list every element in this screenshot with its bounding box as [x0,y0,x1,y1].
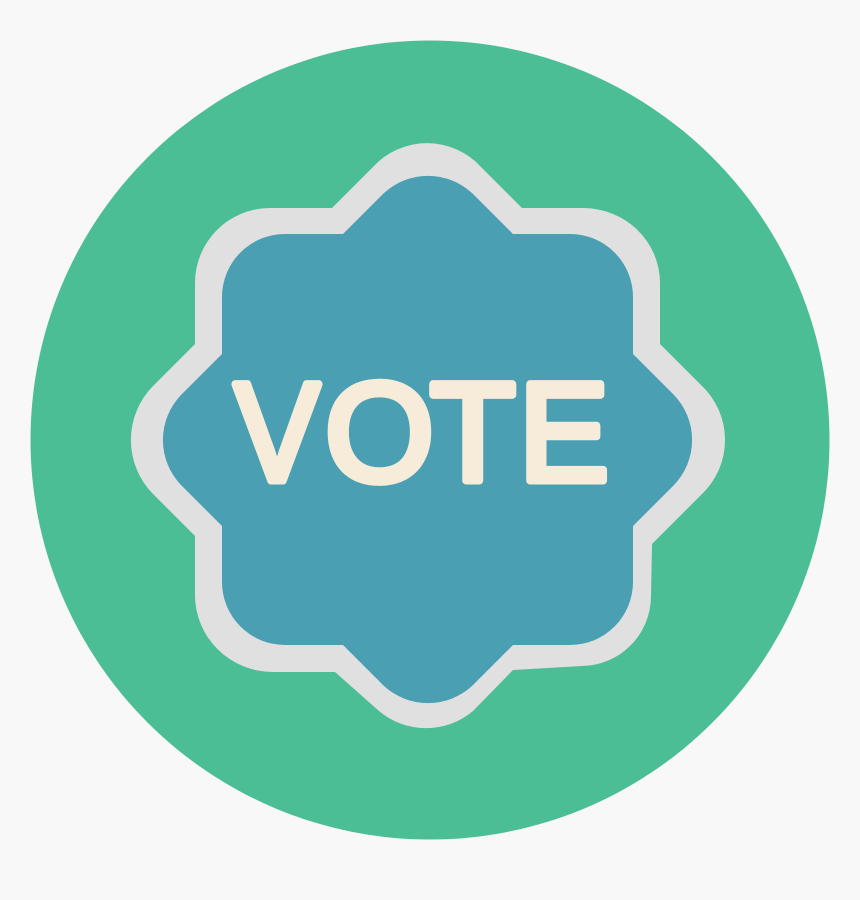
VOTE text: O [325,354,434,510]
VOTE text: E [519,354,609,510]
badge outer border [131,143,725,728]
badge blue inner [163,176,692,703]
VOTE text: V [234,354,320,510]
VOTE text: T [430,354,516,510]
